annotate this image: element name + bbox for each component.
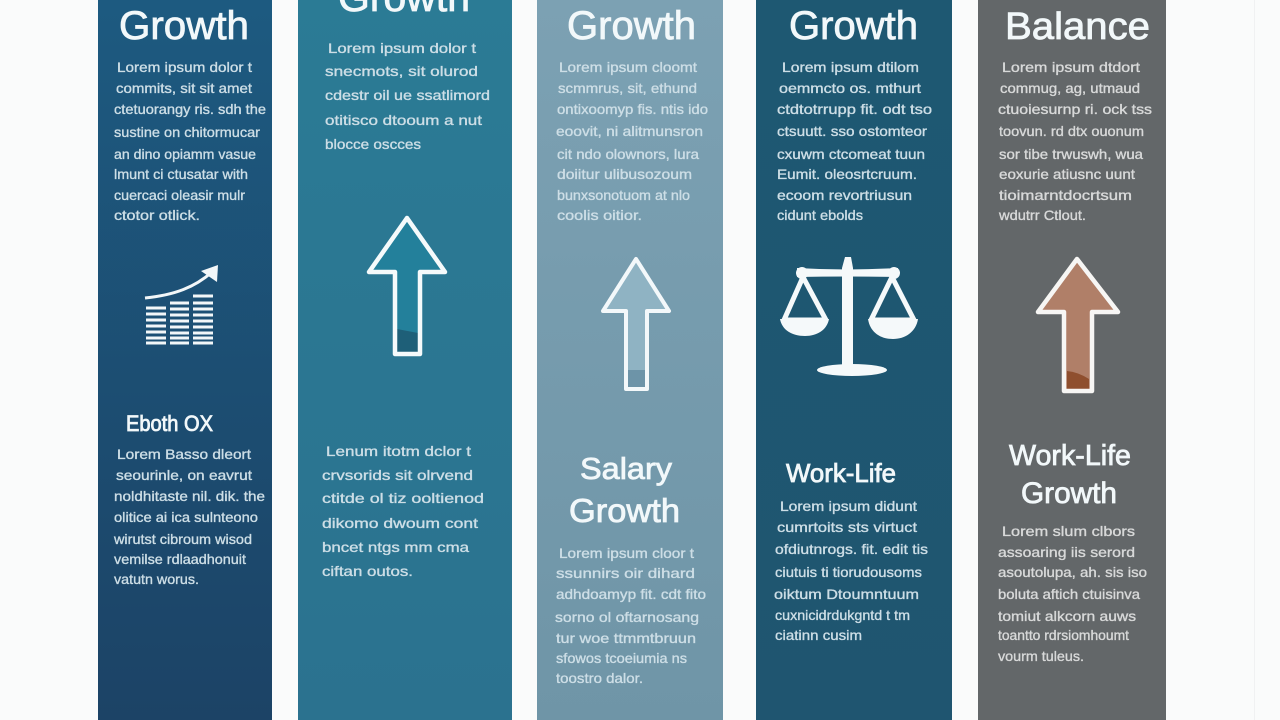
column 4 lower text block: ofdiutnrogs. fit. edit tis	[775, 541, 928, 557]
panel: column 2 growth	[298, 0, 512, 720]
column 1 upper text block: ctetuorangy ris. sdh the	[114, 101, 266, 117]
column 4 lower text block: ciatinn cusim	[775, 627, 862, 643]
icon: bar chart with rising arrow	[145, 265, 218, 343]
column 1 upper text block: lmunt ci ctusatar with	[114, 166, 248, 182]
column 4 upper text block: Lorem ipsum dtilom	[782, 59, 919, 75]
column 2 lower text block: crvsorids sit olrvend	[322, 467, 473, 483]
column 3 upper text block: doiitur ulibusozoum	[557, 166, 692, 182]
column 1 upper text block: an dino opiamm vasue	[114, 146, 256, 162]
column 1 lower text block: vemilse rdlaadhonuit	[114, 551, 246, 567]
column 3 subheading: Salary	[580, 451, 673, 486]
column 2 lower text block	[322, 443, 484, 579]
column 1 lower text block: seourinle, on eavrut	[116, 467, 252, 483]
column 4 lower text block: ciutuis ti tiorudousoms	[775, 564, 922, 580]
column 5 upper text block: wdutrr Ctlout.	[998, 207, 1086, 223]
column 2 lower text block: dikomo dwoum cont	[322, 515, 478, 531]
column 2 upper text block: snecmots, sit olurod	[325, 63, 478, 79]
column 4 lower text block: cumrtoits sts virtuct	[777, 519, 917, 535]
column 1 upper text block: ctotor otlick.	[114, 207, 200, 223]
column 4 lower text block	[774, 498, 928, 643]
column 2 lower text block: bncet ntgs mm cma	[322, 539, 469, 555]
column 5 subheading	[1009, 440, 1131, 510]
column 3 subheading: Growth	[569, 492, 680, 529]
column 5 lower text block: asoutolupa, ah. sis iso	[998, 564, 1147, 580]
column 5 upper text block: eoxurie atiusnc uunt	[999, 166, 1135, 182]
column 2 upper text block: blocce oscces	[325, 136, 421, 152]
column 5 upper text block: commug, ag, utmaud	[1000, 80, 1140, 96]
column 4 background	[756, 0, 952, 720]
column 5 lower text block: assoaring iis serord	[998, 544, 1135, 560]
column 2 upper text block: cdestr oil ue ssatlimord	[325, 87, 490, 103]
column 3 upper text block: bunxsonotuom at nlo	[557, 187, 690, 203]
column 3 upper text block: coolis oitior.	[557, 207, 642, 223]
icon: up arrow light blue	[603, 259, 669, 389]
column 3 lower text block: adhdoamyp fit. cdt fito	[556, 586, 706, 602]
column 5 lower text block: boluta aftich ctuisinva	[998, 586, 1140, 602]
column 1 upper text block	[114, 59, 266, 223]
column 4 lower text block: cuxnicidrdukgntd t tm	[775, 607, 910, 623]
column 3 upper text block: cit ndo olownors, lura	[557, 146, 699, 162]
column 5 upper text block: sor tibe trwuswh, wua	[999, 146, 1143, 162]
column 1 heading: Growth	[119, 4, 249, 48]
column 3 upper text block: eoovit, ni alitmunsron	[556, 123, 703, 139]
column 1 upper text block: cuercaci oleasir mulr	[114, 187, 245, 203]
column 2 lower text block: Lenum itotm dclor t	[326, 443, 471, 459]
column 4 heading: Growth	[789, 4, 918, 48]
column 3 lower text block	[555, 545, 706, 686]
column 5 lower text block: toantto rdrsiomhoumt	[998, 627, 1129, 643]
column 5 upper text block: ctuoiesurnp ri. ock tss	[998, 101, 1152, 117]
column 1 subheading: Eboth OX	[126, 411, 213, 436]
column 4 upper text block: Eumit. oleosrtcruum.	[777, 166, 917, 182]
column 5 heading: Balance	[1005, 6, 1150, 48]
column 2 upper text block	[325, 40, 490, 152]
column 4 upper text block: ctsuutt. sso ostomteor	[777, 123, 927, 139]
column 1 upper text block: commits, sit sit amet	[116, 80, 252, 96]
column 1 lower text block: vatutn worus.	[114, 571, 199, 587]
column 3 lower text block: toostro dalor.	[556, 670, 643, 686]
column 1 upper text block: Lorem ipsum dolor t	[117, 59, 252, 75]
column 2 lower text block: ctitde ol tiz ooltienod	[322, 490, 484, 506]
column 4 upper text block	[777, 59, 932, 223]
column 5 upper text block: tioimarntdocrtsum	[999, 187, 1132, 203]
column 3 upper text block	[556, 59, 708, 223]
icon: balance scales	[780, 257, 918, 376]
panel: column 3 salary growth	[537, 0, 723, 720]
column 3 heading: Growth	[567, 4, 696, 48]
column 3 lower text block: Lorem ipsum cloor t	[559, 545, 694, 561]
column 3 background	[537, 0, 723, 720]
column 4 upper text block: ecoom revortriusun	[777, 187, 912, 203]
column 5 lower text block: tomiut alkcorn auws	[998, 608, 1136, 624]
column 5 lower text block: vourm tuleus.	[998, 648, 1084, 664]
column 3 subheading	[569, 451, 680, 529]
column 4 upper text block: cidunt ebolds	[777, 207, 863, 223]
column 4 upper text block: oemmcto os. mthurt	[779, 80, 921, 96]
column 4 upper text block: cxuwm ctcomeat tuun	[777, 146, 925, 162]
column 5 upper text block	[998, 59, 1152, 223]
column 1 upper text block: sustine on chitormucar	[114, 124, 260, 140]
column 3 lower text block: ssunnirs oir dihard	[556, 565, 695, 581]
column 3 upper text block: scmmrus, sit, ethund	[558, 80, 697, 96]
column 2 lower text block: ciftan outos.	[322, 563, 413, 579]
column 4 subheading: Work-Life	[786, 458, 896, 488]
panel: column 1 growth	[98, 0, 272, 720]
column 3 upper text block: Lorem ipsum cloomt	[559, 59, 697, 75]
column 2 background	[298, 0, 512, 720]
column 5 subheading: Growth	[1021, 477, 1117, 510]
column 5 lower text block: Lorem slum clbors	[1002, 523, 1135, 539]
icon: up arrow teal	[369, 218, 445, 354]
column 1 lower text block: wirutst cibroum wisod	[113, 531, 252, 547]
column 5 lower text block	[998, 523, 1147, 664]
column 5 subheading: Work-Life	[1009, 440, 1131, 472]
column 5 upper text block: Lorem ipsum dtdort	[1002, 59, 1140, 75]
column 1 lower text block	[113, 446, 265, 587]
column 2 upper text block: Lorem ipsum dolor t	[328, 40, 476, 56]
column 1 lower text block: olitice ai ica sulnteono	[114, 509, 258, 525]
panel: column 5 balance	[978, 0, 1166, 720]
column 3 upper text block: ontixoomyp fis. ntis ido	[557, 101, 708, 117]
column 3 lower text block: tur woe ttmmtbruun	[556, 630, 696, 646]
icon: up arrow brown	[1038, 259, 1118, 391]
column 5 upper text block: toovun. rd dtx ouonum	[999, 123, 1144, 139]
column 2 upper text block: otitisco dtooum a nut	[325, 112, 482, 128]
column 1 lower text block: Lorem Basso dleort	[117, 446, 251, 462]
column 5 background	[978, 0, 1166, 720]
column 4 lower text block: Lorem ipsum didunt	[780, 498, 917, 514]
column 4 lower text block: oiktum Dtoumntuum	[774, 586, 919, 602]
column 4 upper text block: ctdtotrrupp fit. odt tso	[777, 101, 932, 117]
column 1 background	[98, 0, 272, 720]
column 3 lower text block: sfowos tcoeiumia ns	[556, 650, 687, 666]
column 1 lower text block: noldhitaste nil. dik. the	[114, 488, 265, 504]
column 3 lower text block: sorno ol oftarnosang	[555, 609, 699, 625]
panel: column 4 work-life	[756, 0, 952, 720]
